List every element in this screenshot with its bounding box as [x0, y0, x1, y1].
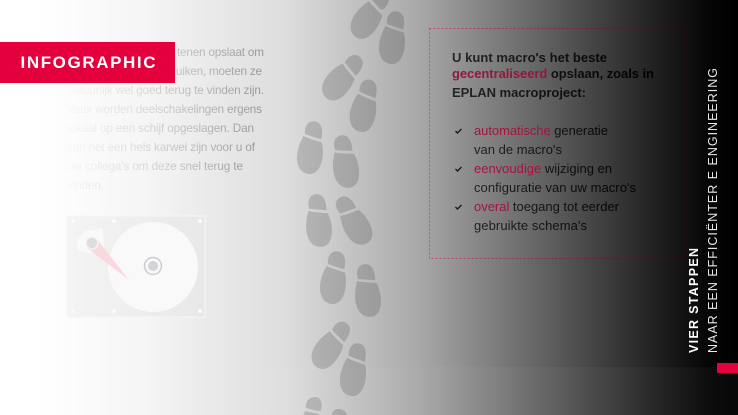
vertical title: VIER STAPPEN [687, 248, 701, 353]
vertical title: NAAR EEN EFFICIËNTER E ENGINEERING [706, 68, 720, 353]
body text block: Vaak worden deelschakelingen ergens [67, 103, 262, 116]
body text block: vinden. [67, 179, 104, 192]
item: automatische generatie: automatische generatie [474, 123, 608, 138]
item: overal toegang: overal toegang tot eerder [474, 199, 620, 214]
infographic tab [0, 42, 175, 83]
body text block: lokaal op een schijf opgeslagen. Dan [67, 122, 254, 135]
body text block: tenen opslaat om [177, 46, 264, 59]
item: automatische generatie [456, 123, 608, 157]
icon: hard disk [67, 216, 205, 317]
body text block: natuurlijk wel goed terug te vinden zijn. [67, 84, 264, 97]
callout heading: U kunt macro's het beste [452, 50, 607, 65]
body text block [67, 46, 264, 192]
infographic tab: INFOGRAPHIC [20, 53, 156, 72]
item: overal toegang [456, 199, 620, 233]
item: eenvoudige wijziging: eenvoudige wijziging en [474, 161, 612, 176]
body text block: kan het een hels karwei zijn voor u of [67, 141, 256, 154]
item: automatische generatie: van de macro's [474, 142, 562, 157]
vertical title [687, 68, 720, 353]
dashed callout box [430, 28, 686, 258]
red accent bar [717, 363, 738, 373]
item: eenvoudige wijziging [456, 161, 636, 195]
bottom lighter band [0, 367, 738, 415]
callout heading [452, 50, 654, 100]
checklist [456, 123, 636, 233]
footprints trail [295, 0, 409, 415]
item: overal toegang: gebruikte schema's [474, 218, 588, 233]
callout heading: gecentraliseerd opslaan, zoals in [452, 66, 654, 81]
callout heading: EPLAN macroproject: [452, 85, 586, 100]
item: eenvoudige wijziging: configuratie van uw macro's [474, 180, 636, 195]
body text block: uw collega's om deze snel terug te [67, 160, 243, 173]
body text block: uiken, moeten ze [176, 65, 262, 78]
